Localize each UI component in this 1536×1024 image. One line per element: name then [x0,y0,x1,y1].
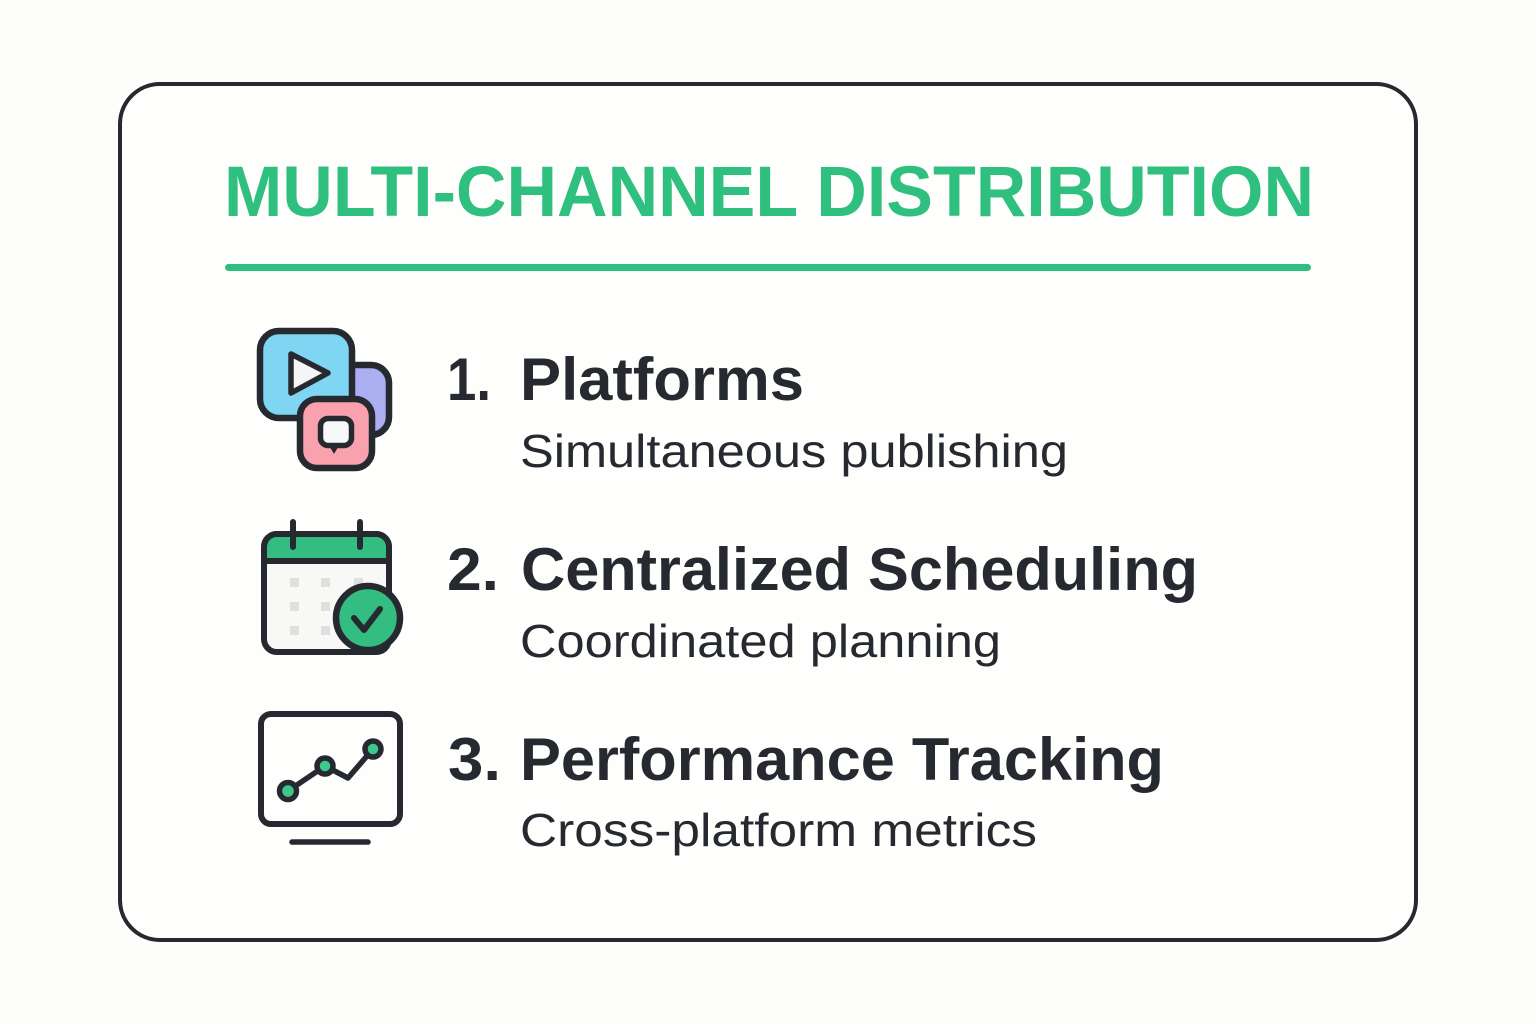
panel: card [120,84,1416,940]
item 1: platforms [260,331,1068,477]
data point 1 [280,782,296,800]
title underline [225,264,1311,271]
icon: calendar with check [264,522,400,652]
monitor screen [261,714,400,824]
data point 3 [365,741,381,757]
heading number 2: 2. [447,536,499,603]
description: coordinated planning: Coordinated planning [520,615,1001,667]
heading: platforms: Platforms [520,346,804,413]
heading number 3: 3. [448,726,501,793]
check mark [354,609,380,630]
icon: overlapping platform tiles [260,331,389,468]
description: simultaneous publishing: Simultaneous publishing [520,425,1068,477]
description: cross-platform metrics: Cross-platform metrics [520,804,1037,856]
chat bubble tail [331,448,337,453]
play triangle [291,354,328,393]
calendar header [264,534,389,561]
title: MULTI-CHANNEL DISTRIBUTION [224,153,1314,232]
item 3: performance tracking [261,714,1164,856]
heading number 1: 1. [447,346,491,413]
blue video tile [260,331,352,418]
monitor base [292,839,368,845]
purple tile [320,365,389,435]
calendar pins [293,522,360,547]
pink chat tile [300,399,372,468]
heading: centralized scheduling: Centralized Scheduling [521,536,1198,603]
icon: monitor with line chart [261,714,400,842]
calendar body [264,534,389,652]
data point 2 [317,758,333,774]
chat bubble [320,418,352,446]
item 2: centralized scheduling [264,522,1198,667]
heading: performance tracking: Performance Tracking [520,726,1164,793]
calendar day cells [290,578,363,635]
check badge [336,586,400,650]
trend line [288,749,373,791]
